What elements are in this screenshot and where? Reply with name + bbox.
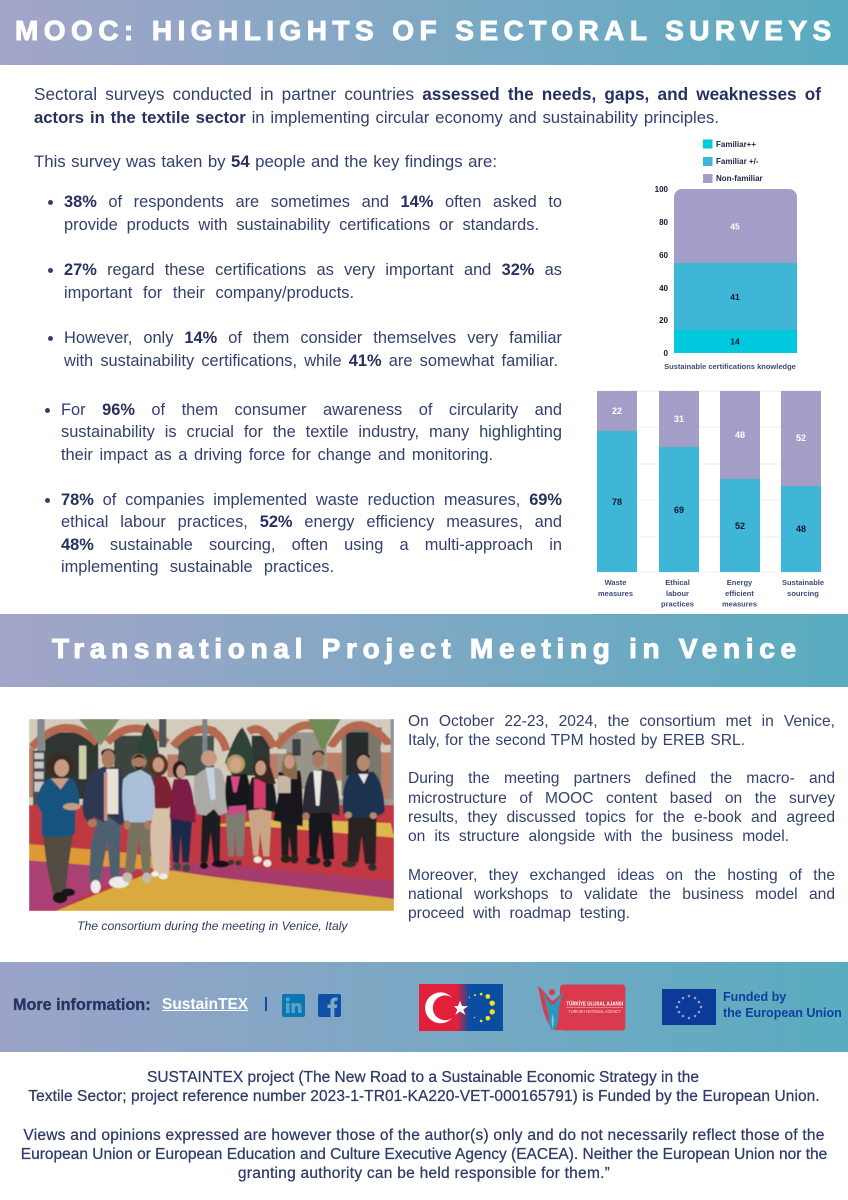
person 7 bbox=[225, 755, 250, 866]
funded by label bbox=[723, 990, 842, 1020]
category labels: practices bbox=[661, 600, 694, 608]
bar: sustainable sourcing: 48 bbox=[796, 524, 806, 534]
category labels: labour bbox=[666, 589, 689, 598]
meeting description: Italy, for the second TPM hosted by EREB SRL. bbox=[408, 732, 745, 749]
category labels: Sustainable bbox=[782, 578, 824, 587]
funding disclaimer: Textile Sector; project reference number 2023-1-TR01-KA220-VET-000165791) is Funded by the European Union. bbox=[28, 1088, 820, 1105]
bullet: certification requests bbox=[48, 193, 562, 234]
link: SustainTEX bbox=[162, 996, 248, 1013]
bullet: certification requests: provide products with sustainability certifications or standards. bbox=[64, 216, 539, 234]
axis labels: 0 bbox=[664, 349, 669, 358]
bullet: implemented measures: implementing sustainable practices. bbox=[61, 558, 334, 576]
person 6 bbox=[194, 750, 230, 869]
bar: ethical labour bbox=[659, 391, 699, 572]
floor bbox=[29, 805, 394, 911]
person 11 bbox=[342, 753, 385, 871]
meeting description: During the meeting partners defined the macro- and bbox=[408, 770, 835, 787]
person 8 bbox=[248, 758, 277, 867]
title: MOOC: HIGHLIGHTS OF SECTORAL SURVEYS bbox=[15, 15, 837, 46]
bullet: implemented measures: 78% of companies implemented waste reduction measures, 69% bbox=[61, 491, 562, 509]
bar: sustainable sourcing bbox=[781, 391, 821, 572]
category labels: Waste bbox=[605, 578, 626, 587]
bullet: certification importance bbox=[48, 261, 562, 302]
bar: waste measures bbox=[597, 391, 637, 572]
bar: energy efficient: 48 bbox=[735, 430, 745, 440]
funding disclaimer: SUSTAINTEX project (The New Road to a Sustainable Economic Strategy in the bbox=[147, 1069, 699, 1086]
bar: waste measures: 78 bbox=[612, 497, 622, 507]
logo: Turkish National Agency bbox=[538, 984, 626, 1030]
legend: Familiar +/- bbox=[716, 157, 759, 166]
bar: energy efficient: 52 bbox=[735, 521, 745, 531]
legend bbox=[703, 140, 763, 183]
meeting description: national workshops to validate the business model and bbox=[408, 886, 835, 903]
footer band: links and logos bbox=[0, 962, 848, 1052]
person 4 bbox=[149, 754, 172, 879]
category labels: sourcing bbox=[787, 589, 819, 598]
header band: MOOC highlights bbox=[0, 0, 848, 65]
meeting description: microstructure of MOOC content based on the survey bbox=[408, 790, 835, 807]
funded by label: the European Union bbox=[723, 1006, 842, 1020]
bullet: certification importance: important for their company/products. bbox=[64, 284, 354, 302]
axis title: Sustainable certifications knowledge bbox=[664, 362, 796, 371]
category labels: efficient bbox=[725, 589, 754, 598]
intro paragraph bbox=[34, 84, 821, 127]
bullet: consumer awareness: their impact as a driving force for change and monitoring. bbox=[61, 446, 493, 464]
person 10 bbox=[302, 750, 340, 867]
photo: consortium group bbox=[29, 719, 394, 911]
axis labels: 80 bbox=[659, 218, 669, 227]
axis labels: 60 bbox=[659, 251, 669, 260]
stacked bar: 41 bbox=[730, 292, 740, 302]
person 1 bbox=[37, 754, 80, 903]
meeting description: on its structure alongside with the business model. bbox=[408, 828, 789, 845]
bullet: implemented measures: ethical labour practices, 52% energy efficiency measures, and bbox=[61, 513, 562, 531]
funding disclaimer: granting authority can be held responsible for them.” bbox=[238, 1165, 610, 1182]
person 5 bbox=[170, 761, 196, 872]
more information label: More information: bbox=[13, 996, 151, 1014]
meeting description: results, they discussed topics for the e-book and agreed bbox=[408, 809, 835, 826]
bar: ethical labour: 69 bbox=[674, 505, 684, 515]
stacked bar bbox=[674, 189, 797, 353]
bullet: certification familiarity: However, only 14% of them consider themselves very familiar bbox=[64, 329, 562, 347]
icon: Facebook bbox=[318, 994, 341, 1017]
stacked bar: 14 bbox=[730, 336, 740, 346]
person 9 bbox=[273, 752, 303, 864]
chart: sustainable certifications knowledge bbox=[655, 140, 797, 371]
category labels: Energy bbox=[727, 578, 753, 587]
bar: sustainable sourcing: 52 bbox=[796, 433, 806, 443]
icon: LinkedIn bbox=[282, 994, 305, 1017]
bullet: consumer awareness bbox=[45, 401, 562, 464]
logo: EU flag bbox=[662, 989, 716, 1025]
bullet: certification familiarity bbox=[48, 329, 562, 370]
meeting description: Moreover, they exchanged ideas on the hosting of the bbox=[408, 867, 835, 884]
funding disclaimer: Views and opinions expressed are however those of the author(s) only and do not necessarily reflect those of the bbox=[23, 1127, 825, 1144]
bullet: certification requests: 38% of respondents are sometimes and 14% often asked to bbox=[64, 193, 562, 211]
bar: ethical labour: 31 bbox=[674, 414, 684, 424]
meeting description bbox=[408, 713, 835, 922]
axis labels: 40 bbox=[659, 284, 669, 293]
bullet: consumer awareness: sustainability is crucial for the textile industry, many highlighting bbox=[61, 423, 562, 441]
separator bbox=[265, 997, 267, 1011]
bullet: consumer awareness: For 96% of them consumer awareness of circularity and bbox=[61, 401, 562, 419]
bullet: implemented measures: 48% sustainable sourcing, often using a multi-approach in bbox=[61, 536, 562, 554]
axis labels: 20 bbox=[659, 316, 669, 325]
chart: sustainable practices bbox=[597, 390, 824, 608]
funding disclaimer bbox=[21, 1069, 827, 1182]
axis labels: 100 bbox=[655, 185, 669, 194]
category labels: measures bbox=[722, 600, 757, 608]
funding disclaimer: European Union or European Education and Culture Executive Agency (EACEA). Neither the European Union nor the bbox=[21, 1146, 827, 1163]
photo caption: The consortium during the meeting in Venice, Italy bbox=[77, 919, 348, 933]
bar: energy efficient bbox=[720, 391, 760, 572]
meeting description: On October 22-23, 2024, the consortium met in Venice, bbox=[408, 713, 835, 730]
logo: Turkey and EU flags bbox=[419, 984, 503, 1031]
category labels bbox=[598, 578, 824, 608]
section title: Transnational Project Meeting in Venice bbox=[52, 633, 802, 664]
bullet: certification familiarity: with sustainability certifications, while 41% are somewhat familiar. bbox=[64, 352, 558, 370]
category labels: measures bbox=[598, 589, 633, 598]
bullet: certification importance: 27% regard these certifications as very important and 32% as bbox=[64, 261, 562, 279]
bullet: implemented measures bbox=[45, 491, 562, 576]
intro paragraph: Sectoral surveys conducted in partner countries assessed the needs, gaps, and weaknesses of bbox=[34, 84, 821, 104]
survey sample statement: This survey was taken by 54 people and the key findings are: bbox=[34, 152, 497, 171]
header band: Venice meeting bbox=[0, 614, 848, 687]
intro paragraph: actors in the textile sector in implementing circular economy and sustainability principles. bbox=[34, 108, 719, 127]
bar: waste measures: 22 bbox=[612, 406, 622, 416]
stacked bar: 45 bbox=[730, 222, 740, 232]
legend: Non-familiar bbox=[716, 174, 763, 183]
axis labels bbox=[655, 185, 669, 358]
category labels: Ethical bbox=[665, 578, 690, 587]
person 2 bbox=[82, 749, 129, 893]
building bbox=[29, 719, 394, 827]
meeting description: proceed with roadmap testing. bbox=[408, 905, 630, 922]
funded by label: Funded by bbox=[723, 990, 786, 1004]
legend: Familiar++ bbox=[716, 140, 756, 149]
person 3 bbox=[122, 754, 157, 883]
